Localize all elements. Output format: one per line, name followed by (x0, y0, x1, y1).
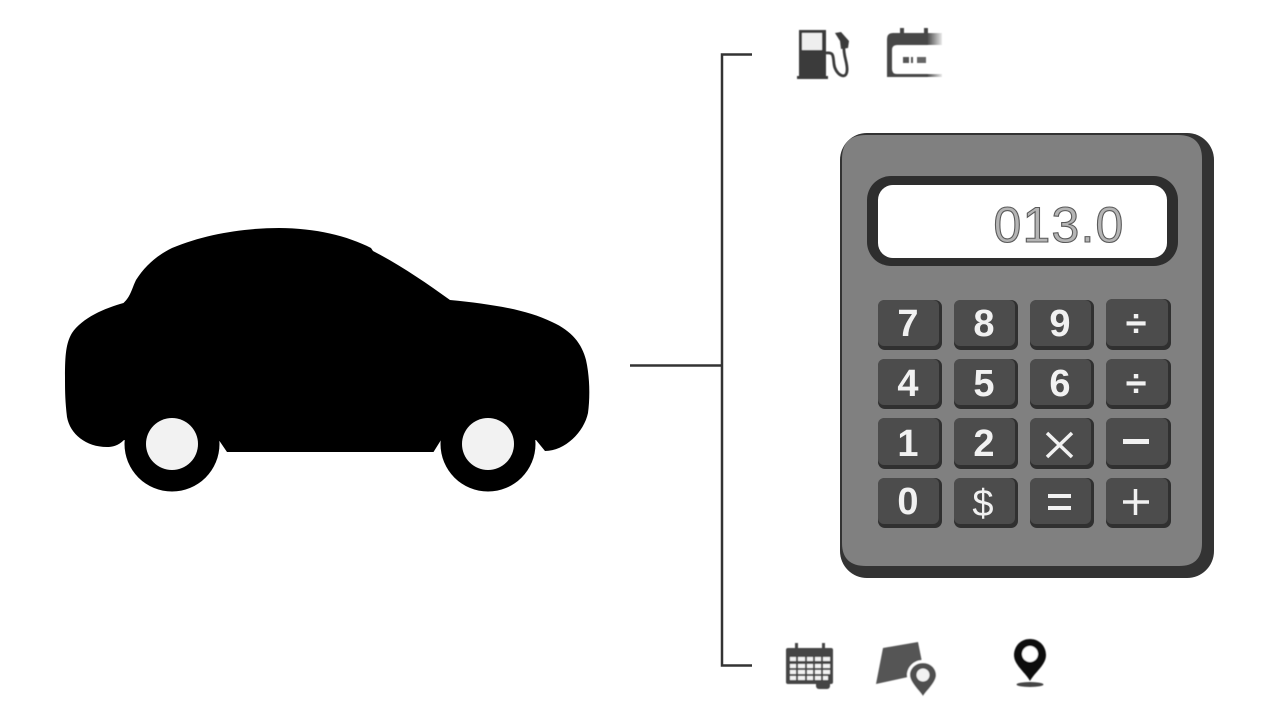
key 4 (878, 359, 942, 409)
icon: calendar grid (786, 643, 833, 689)
key multiply (1030, 418, 1094, 469)
front wheel (440, 396, 536, 492)
calculator display: 013.0 (993, 197, 1125, 253)
key 1: 1 (897, 423, 919, 465)
key 0 (878, 478, 942, 528)
key divide second: ÷ (1126, 363, 1146, 405)
key dollar (954, 478, 1018, 528)
key 7 (878, 300, 942, 350)
panel: calculator (840, 133, 1214, 578)
key 2 (954, 418, 1018, 469)
key divide (1106, 299, 1171, 350)
car silhouette (65, 228, 589, 492)
key dollar: $ (972, 483, 994, 525)
key 6 (1030, 359, 1094, 409)
key 1 (878, 418, 942, 469)
key 9: 9 (1049, 303, 1071, 345)
icon: fuel pump (797, 30, 849, 79)
key 6: 6 (1049, 363, 1071, 405)
key 8: 8 (973, 303, 995, 345)
key 5 (954, 359, 1018, 409)
key divide: ÷ (1126, 303, 1146, 345)
calculator body (840, 133, 1214, 578)
key 7: 7 (897, 303, 919, 345)
key 9 (1030, 300, 1094, 350)
icon: location pin (1014, 639, 1046, 687)
key equals (1030, 478, 1094, 528)
key divide second (1106, 359, 1171, 409)
rear wheel (124, 396, 220, 492)
bracket connector (630, 54, 752, 666)
icon: fading calendar (887, 26, 944, 82)
key 0: 0 (897, 481, 919, 523)
key 4: 4 (897, 363, 919, 405)
calculator display (867, 176, 1178, 266)
icon: map with pin (876, 642, 939, 699)
key minus (1106, 418, 1171, 469)
key plus (1106, 478, 1171, 528)
key 5: 5 (973, 363, 995, 405)
key 8 (954, 300, 1018, 350)
key 2: 2 (973, 423, 995, 465)
